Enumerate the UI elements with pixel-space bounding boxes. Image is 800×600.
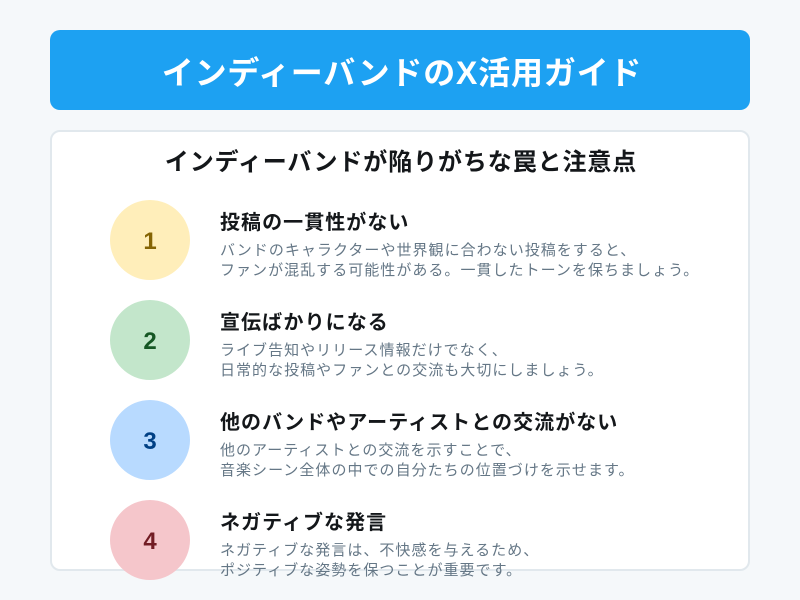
item 3 title: 他のバンドやアーティストとの交流がない bbox=[220, 412, 618, 434]
number badge 4: 4 bbox=[143, 528, 157, 555]
item 1 description: バンドのキャラクターや世界観に合わない投稿をすると、 bbox=[220, 242, 636, 259]
item 4 description: ポジティブな姿勢を保つことが重要です。 bbox=[220, 562, 522, 579]
number badge 3: 3 bbox=[143, 428, 157, 455]
item 1 title: 投稿の一貫性がない bbox=[220, 212, 409, 234]
item 2 description bbox=[220, 342, 604, 379]
item 2 title: 宣伝ばかりになる bbox=[220, 312, 389, 334]
item 3 bbox=[110, 400, 635, 480]
number badge 1 bbox=[110, 200, 190, 280]
number badge 2 bbox=[110, 300, 190, 380]
item 3 description: 音楽シーン全体の中での自分たちの位置づけを示せます。 bbox=[220, 462, 635, 479]
panel: pitfalls card bbox=[50, 130, 750, 571]
item 3 description bbox=[220, 442, 635, 479]
title banner bbox=[50, 30, 750, 110]
item 1 description bbox=[220, 242, 699, 279]
item 2 bbox=[110, 300, 604, 380]
title: インディーバンドのX活用ガイド bbox=[162, 55, 642, 91]
number badge 2: 2 bbox=[143, 328, 157, 355]
number badge 1: 1 bbox=[143, 228, 157, 255]
item 4 bbox=[110, 500, 539, 580]
item 2 description: ライブ告知やリリース情報だけでなく、 bbox=[220, 342, 508, 359]
heading: インディーバンドが陥りがちな罠と注意点 bbox=[165, 149, 637, 176]
item 2 description: 日常的な投稿やファンとの交流も大切にしましょう。 bbox=[220, 362, 604, 379]
item 3 description: 他のアーティストとの交流を示すことで、 bbox=[220, 442, 522, 459]
item 4 title: ネガティブな発言 bbox=[220, 512, 387, 534]
item 1 description: ファンが混乱する可能性がある。一貫したトーンを保ちましょう。 bbox=[220, 262, 699, 279]
number badge 3 bbox=[110, 400, 190, 480]
item 1 bbox=[110, 200, 699, 280]
item 4 description bbox=[220, 542, 539, 579]
item 4 description: ネガティブな発言は、不快感を与えるため、 bbox=[220, 542, 539, 559]
number badge 4 bbox=[110, 500, 190, 580]
